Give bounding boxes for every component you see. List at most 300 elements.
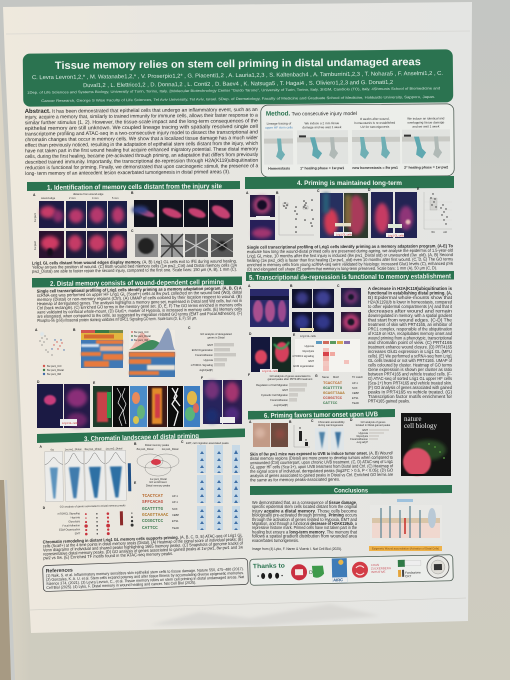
panel A labels: 4 mm (92, 196, 98, 200)
panel E motif table: GCATTTTG (142, 507, 163, 512)
panel B microscopy (131, 191, 233, 227)
panel G motif table: TF match (352, 375, 364, 379)
method column notes: 8 weeks after wound, (360, 117, 390, 121)
section 2 caption: memory (Distal) or non-memory regions (Ctrl). (A) UMAP of cells colored by their location respect to wound. (B) (37, 294, 242, 302)
panel C GO bar chart: Hypoxia (204, 358, 214, 362)
panel E motif table (134, 480, 179, 531)
references list: (1) Naik, S. et al. Inflammatory memory sensitizes skin epithelial stem cells to tissue damage. Nature 550, 475–480 (2017). (46, 566, 244, 578)
section 6 caption (250, 450, 394, 482)
heading 5: 5. Transcriptional de-repression is functional to memory establishment (249, 273, 452, 282)
panel B density peaks: 8w pw1_Wd (134, 338, 149, 342)
authors (32, 71, 444, 90)
icon: footprint logo (257, 573, 283, 579)
panel A whole-mount images: A (246, 191, 249, 195)
logo: green foundation (398, 559, 421, 567)
section 3 caption: representative distal memory peaks. (D) GO analysis of genes associated to gained peaks at 1w pw1, 8w pw1 and 1w (43, 544, 244, 556)
abstract text block: epithelial memory are still unknown. We coupled lineage tracing with spatially resolved single cell (25, 124, 258, 132)
panel E segmentation images: E (93, 381, 96, 385)
panel B tumour plot: B (289, 420, 292, 424)
references list (46, 566, 245, 590)
conclusions text: through the activation of genes related to Hypoxia, EMT and (252, 517, 358, 522)
panel F GO bar chart: Regulation of Cell Migration (256, 383, 289, 387)
panel B heatmap left: B (73, 328, 76, 332)
conclusions text: Image from (4) Lyko, F. Naren & Vlaeric I. Nat Cell Biol (2025). (252, 547, 342, 551)
logo: AIRC (332, 558, 347, 582)
section 5 body text: H2A(K119)Ub is lower in homeostasis, compared (368, 300, 452, 304)
panel G motif table: CEBP (352, 391, 359, 395)
panel D GO chart: D (350, 418, 353, 422)
logo: Deliver green: D (309, 570, 313, 576)
panel A tumour photographs (249, 420, 288, 447)
panel D GO dot plot: GO analysis of genes associated to Distal memory peaks (60, 503, 126, 509)
conclusions text: specific epidermal stem cells located distant from the original (252, 504, 357, 509)
heading 4: 4. Priming is maintained long-term (297, 180, 402, 187)
method column notes: and we wait 1 week (412, 124, 440, 129)
section 4 caption: evaluate how long the wound-distal primed cells are preserved during ageing, we analyse the epidermis of 1.5-year-old (247, 248, 454, 254)
panel E motif table: Distal memory peaks (146, 484, 171, 488)
panel D pS6 images: Lrig1 GL cells (388, 234, 404, 238)
panel B density peaks (129, 328, 175, 350)
method stage labels (268, 165, 448, 171)
panel D Glut1 images: D (37, 380, 40, 384)
panel E GO heatmap: EMT (309, 359, 314, 363)
panel: thanks to / funders (250, 555, 453, 585)
abstract text block: described trained immunity. Importantly, the transcriptional de-repression through H2A(K119)ubiquitination (25, 158, 258, 166)
panel D GO dot plot (43, 503, 134, 536)
panel D GO dot plot: D (43, 506, 46, 510)
panel G motif table: SOX (352, 386, 358, 390)
section 5 body text: functional in establishing distal priming. (A, (368, 290, 452, 296)
panel E motif table: SOX (172, 507, 178, 511)
section 5 body text: decreases after wound and remain (368, 308, 453, 314)
panel B microscopy: B (131, 191, 134, 195)
conclusions text (252, 500, 358, 551)
panel B tumour plot (289, 420, 310, 447)
heading 2: 2. Distal memory consists of wound-dependent cell priming (50, 279, 224, 288)
abstract text block: reduction is functional for priming. Finally, we demonstrated that upon carcinogenic stimuli, the presence of a (25, 163, 258, 171)
UMAP legend (43, 364, 64, 376)
panel B venn diagram (134, 442, 179, 481)
conclusions text: repressive histone mark. Primed cells have not taken part in the (252, 525, 358, 530)
title banner (23, 49, 453, 107)
logo: Deliver green (309, 566, 324, 578)
panel: section 1 (27, 181, 240, 274)
conclusions orange legend bar: Epigenetic Wound accumulation (Activation of Distal Cells) (372, 547, 439, 551)
panel F GO bar chart: Focal Adhesion (270, 398, 289, 402)
section 5 body text: G) ATAC-seq of sorted Lrig1 GL upper HF cells (368, 376, 453, 381)
panel D pS6 images: D (368, 188, 371, 192)
section 1 caption: pw2_Distal) are able to faster repair the second injury, compared to the first one. Scale bars: 150 µm (A, B), 1 mm (C). (32, 267, 237, 274)
section 3 caption: Chromatin remodeling in distant Lrig1 GL memory cells supports priming. (A, B, C, D, E) ATAC-seq of Lrig1 GL (43, 532, 243, 544)
panel: section 3 (37, 428, 245, 560)
section 3 caption: Venn diagrams of individual and shared peaks highlighting 1665 memory peaks. (C) Snapshots of genome tracks of (43, 540, 244, 552)
panel G motif table: TEAD (352, 401, 359, 405)
panel D GO dot plot: ECM Organization (59, 527, 81, 532)
method stage labels: 1° healing phase = 1w pw1 (300, 166, 344, 170)
section 3 caption: cells (Scarf+) at the 4 time points in distal memory areas (Distal). (A) Heatmap of the signal score of individual peaks; (B) (43, 536, 243, 548)
panel E GO heatmap: Hypoxia (305, 344, 315, 348)
references heading: References (46, 568, 73, 574)
journal cover: Nature Cell Biology: nature (404, 415, 422, 423)
panel E GO heatmap: ECM organization (293, 364, 315, 368)
panel E motif table: CCGGCTCC (142, 519, 163, 524)
panel D PRT4165 images (249, 332, 291, 373)
conclusions text: We demonstrated that, as a consequence of tissue damage, (252, 500, 357, 505)
section 3 caption: pw2 vs 0w. (E) Enriched TF motifs found in the ATAC-seq memory peaks. (43, 551, 173, 560)
panel B heatmap left (73, 328, 123, 368)
panel C GO bar chart: GO analysis of deregulated (200, 332, 232, 336)
section 4 caption (247, 243, 454, 272)
section 2 caption: Phospho-S6 (pS6) ribosomal protein staining validates mTORC1 Signaling GO term. Scale bars (D, E, F): 50 µm. (37, 316, 197, 323)
panel B density peaks: 8w pw1_Ctrl (134, 330, 149, 334)
panel D GO chart: Glycolysis (356, 434, 369, 438)
section 4 caption: Lrig1 GL mice, 10 months after the first injury is induced (8w pw1_Distal old) or unwounded (0w_old). (A, B) Second (247, 252, 454, 259)
panel B venn diagram: Distal memory peaks (145, 443, 170, 447)
conclusions heading (250, 485, 452, 495)
panel A UMAP scatter (35, 328, 65, 376)
panel E motif table: CATTCC (142, 526, 158, 531)
references list: Science 374, (2021). (3) Levra Levron, C., et al. Tissue memory relies on stem cell priming in distal undamaged areas. Nat (46, 574, 245, 586)
panel B H2AK119Ub images (290, 284, 334, 332)
abstract text block: long- term memory of an antecedent lesion exacerbated tumorigenesis in distal primed areas (3). (25, 169, 230, 177)
method column notes: upper HF stem cells (265, 125, 293, 130)
references list: Cell Biol (2025). (4) Lyko, F. Distal memory in wound healing and cancer. Nat Cell Biol (2025). (46, 580, 196, 590)
panel B H2AK119Ub images: B (290, 284, 293, 288)
panel C accessibility heatmaps: during carcinogenesis (318, 423, 344, 427)
panel F GO bar chart: GO analysis of genes associated to (270, 374, 311, 378)
abstract text block: Abstract. It has been demonstrated that epithelial cells that undergo an inflammatory event, such as an (25, 107, 258, 115)
conclusions text: injury acquire a distal memory . Those cells become (252, 508, 358, 513)
logo: Fondazione CRT (398, 569, 421, 578)
conclusions text: Migration, and through a functional decrease of H2AK119ub, a (252, 521, 358, 526)
logo: university seal (427, 556, 449, 578)
section 6 caption: GL upper HF cells (Sca-1+), upon UVB treatment from Distal and Ctrl. (C) Heatmap of (250, 463, 394, 470)
section 5 body text: A decrease in H2A(K119)ubiquitination is (368, 286, 453, 291)
logo: red circle (291, 564, 307, 580)
panel C GO bar chart: EMT (208, 343, 213, 347)
abstract text block: transcriptome profiling and ATAC-seq in a two-consecutive injury model to dissect the transcriptional and (25, 129, 258, 138)
panel D GO chart: GO analysis of genes (361, 420, 386, 424)
logo: Fondazione CRT: CRT (405, 574, 411, 578)
panel C wound images (337, 284, 361, 332)
method column notes: damage and we wait 1 week (302, 125, 342, 129)
panel: conclusions (250, 485, 452, 551)
conclusions text: exacerbates tumorigenesis. (252, 538, 299, 543)
section 2 caption: Heatmap of deregulated genes. The analysis highlights a memory gene set, expressed in Distal and Wd cells, but not in (37, 298, 243, 306)
method column notes (265, 116, 445, 130)
section 5 body text: Gene expression is shown per cluster as ratio (368, 367, 453, 372)
method column notes: Lineage tracing of (267, 121, 291, 126)
authors: C. Levra Levron1,2,* , M. Watanabe1,2,* , V. Proserpio1,2* , G. Piacenti1,2 , A. Lauria1,2,3 , S. Kaltenbach4 , A. Tamburrini1,2,3 , T. Nohara5 , F. Anselmi1,2 , C. (32, 71, 443, 81)
method schematic: second healing (402, 129, 450, 164)
title: Tissue memory relies on stem cell priming in distal undamaged areas (55, 56, 421, 72)
thanks heading: Thanks to (253, 563, 285, 570)
panel A labels: 1w pw1 (33, 213, 37, 222)
panel C wound images: C (337, 284, 340, 288)
section 5 body text: to other epidermal compartments (A) and that it (368, 304, 453, 309)
authors: Duval1,2 , L. Elettrico1,2 , D. Donna1,2 , L. Conti2 , D. Baev4 , K. Natsuga5 , T. Hagai4 , S. Oliviero1,2,3 and G. Donati1,2 (83, 80, 393, 89)
abstract text block: effect than previously noticed, resulting in the adaptation of epithelial stem cells distant from the injury, which (25, 141, 258, 149)
panel E motif table: GCAGTTAAAC (142, 513, 169, 518)
section 6 caption: the same as for memory peaks-associated genes. (250, 477, 340, 482)
panel E motif table: ETS1 (172, 519, 179, 523)
panel A microscopy row 2 (39, 231, 127, 258)
method schematic: first healing (297, 130, 348, 164)
panel C GO bar chart: mTORC1 Signaling (191, 363, 214, 367)
heading 6: 6. Priming favors tumor onset upon UVB (264, 411, 378, 420)
panel D GO dot plot: Hypoxia (71, 515, 81, 519)
panel B dot plot: B (276, 191, 279, 195)
panel G motif table: CATTCC (323, 402, 338, 406)
panel C GO bar chart: -log10(adjP) (199, 368, 213, 372)
panel A epidermal whole-mount (248, 284, 289, 327)
section 2 caption: Ctrl (back rectangle). (C) Enriched GO terms in the memory gene set. (D, E, F) The GO terms enriched in memory cells (37, 302, 242, 310)
panel C GO bar chart: C (188, 326, 191, 330)
section 5 body text: between PRT4165 and vehicle treated cells. (F- (368, 372, 452, 376)
section 5 body text: cells). (E) We performed a scRNA-seq from Lrig1 (368, 354, 452, 358)
panel E motif table: AP-1 (172, 500, 178, 504)
section 5 body text: PRT4165 gained peaks. (368, 398, 410, 404)
section 2 caption: are elongated, when compared to 8w cells, as suggested by migration related GO terms (EMT and Focal Adhesion). (F) (37, 311, 243, 319)
panel C Glut1 images: Lrig1 GL cells (336, 232, 352, 236)
panel A labels (33, 192, 118, 250)
panel F pS6 images (201, 376, 242, 424)
panel A peak heatmaps (39, 443, 131, 502)
panel C GO bar chart: Focal Adhesion (195, 353, 214, 357)
panel E GO heatmap: Lrig1 GL cells (300, 334, 316, 338)
panel A tumour photographs: A (249, 420, 252, 424)
panel C GO bar chart: ECM Organization (192, 348, 214, 352)
panel C Glut1 images: C (317, 189, 320, 193)
method column notes: overlapping tissue damage (407, 120, 445, 125)
method schematic: new homeostasis (352, 130, 400, 164)
method column notes: homeostasis is re-established (354, 121, 396, 125)
heading 1: 1. Identification of memory cells distant from the injury site (47, 183, 222, 192)
panel C Glut1 images (317, 189, 368, 238)
panel G motif table: G (315, 374, 318, 378)
logo: Chan Zuckerberg Initiative: ZUCKERBERG (371, 566, 392, 571)
section 5 body text: PRC1 complex, responsible of the ubiquitination (368, 326, 452, 332)
panel: section 6 (248, 409, 395, 482)
panel E motif table: TCACTCAT (142, 494, 163, 499)
panel A labels: 2 mm (69, 196, 75, 200)
panel: section 4 (245, 176, 454, 272)
panel D Glut1 images: Lrig1 GL cells (62, 421, 78, 425)
panel D GO chart: Hypoxia (359, 431, 369, 435)
panel C accessibility heatmaps: C (311, 419, 314, 423)
panel F GO bar chart: gained peaks after PRT4165 treatment (268, 377, 313, 381)
panel: section 2 (32, 276, 243, 428)
section 5 body text: peaks in PRT4165 vs vehicle treated. (G) (368, 390, 453, 394)
panel G motif table: ETS1 (352, 396, 359, 400)
panel D GO dot plot: EMT (75, 531, 81, 535)
panel F GO bar chart: F (248, 373, 250, 377)
heading 3: 3. Chromatin landscape of distal priming (84, 433, 199, 443)
panel E cell shape plot: Wt (431, 230, 435, 234)
panel A microscopy row 1 (39, 201, 127, 228)
panel A labels: distance from wound edge (73, 192, 104, 196)
UMAP legend: 8w pw1_Wd (47, 372, 62, 376)
panel E motif table: CEBP (172, 513, 179, 517)
panel A labels: A (33, 193, 36, 197)
heading 4 (245, 176, 454, 189)
panel G motif table: CCGGCTCC (323, 397, 343, 401)
affiliations: 1Dep. of Life Sciences and Systems Biology, University of Turin, Torino, Italy. 2Molecular Biotechnology Center "Guido Tarone", University of Turin, Torino, Italy. 3IIGM, Candiolo (TO), Italy. 4Shmunis School of Biomedicine and (27, 86, 440, 95)
section 5 body text: GL cells treated or not with PRT4165. UMAP of (368, 358, 453, 363)
heading 3 (37, 428, 245, 443)
section 5 body text: (F) GO analysis of genes associated with gained (368, 385, 452, 390)
section 4 caption: healing (1w pw2_old) is faster than first healing (1w pw1_old) even 10 months after first wound. (C, D, E) The GO terms (247, 256, 453, 263)
section 5 body text: of K119 on H2A, recapitulates memory onset and (368, 331, 452, 336)
panel B venn diagram: 8w pw1_Distal (137, 447, 154, 451)
journal cover: Nature Cell Biology: cell biology (404, 422, 437, 430)
panel A peak heatmaps: 8w pw1_Distal (85, 447, 102, 451)
method schematic: homeostasis (264, 130, 293, 165)
conclusions skin schematic (370, 499, 442, 543)
method column notes: We induce a 2 mm tissue (305, 121, 340, 125)
panel C wound closure images (131, 229, 233, 257)
conclusions text: healing but ensure a long-term memory. The memory that (252, 529, 358, 534)
panel F GO bar chart: -Log10(adjP) (273, 403, 288, 407)
panel F GO bar chart: Cytosolic Cell Migration (261, 393, 289, 397)
panel F pS6 images: F (201, 376, 203, 380)
section 6 caption: distal memory regions (Distal) are more prone to develop tumors when compared to (250, 455, 393, 461)
panel A peak heatmaps: A (39, 445, 43, 449)
panel D GO dot plot: mTORC1 Signaling (58, 511, 80, 516)
panel G motif table: Name (322, 375, 329, 379)
panel A peak heatmaps: 1w pw2_Distal (106, 446, 123, 451)
logo: Chan Zuckerberg Initiative (352, 561, 392, 578)
section 5 body text: wound priming from a phenotypic, transcriptional (368, 336, 452, 340)
panel G motif table (315, 374, 364, 406)
section 4 caption: enriched in memory cells from young scRNA-seq were validated by histology: increased Glut1 levels (C), enhanced pS6 (247, 261, 454, 267)
section 5 body text: (Sca-1+) from PRT4165 and vehicle treated skin. (368, 380, 452, 386)
panel A labels: wound edge (41, 196, 56, 200)
section 5 body text (368, 286, 453, 404)
section 4 caption: Single cell transcriptional profiling of Lrig1 cells identify priming as a memory adaptation program. (A-E) To (247, 243, 453, 250)
panel E motif table: TEAD (172, 526, 179, 530)
section 5 body text: treatment of skin with PRT4165, an inhibitor of (368, 322, 453, 327)
panel C accessibility heatmaps (311, 419, 345, 450)
method column notes: We induce an identical and (407, 116, 445, 121)
panel D PRT4165 images: Lrig1 GL cells (262, 369, 278, 373)
panel E GO heatmap: mTORC1 signaling (292, 354, 315, 358)
method heading: Method. Two consecutive injury model (266, 110, 357, 118)
panel E GO heatmap: Glycolysis (302, 349, 315, 353)
panel: method (261, 104, 454, 177)
panel: section 5 (246, 271, 454, 407)
panel A labels: 5 mm (112, 196, 118, 200)
panel E cell shape plot: old (443, 230, 447, 234)
panel C GO bar chart (188, 326, 236, 372)
panel C accessibility heatmaps: Chromatin accessibility (318, 420, 345, 424)
section 2 caption: were validated by confocal whole-mount. (D) Glut1+, marker of Hypoxia, is increased in memory cells. (E) Memory cells (37, 306, 242, 315)
panel A peak heatmaps: 1w pw1_Distal (65, 447, 82, 451)
panel G motif table: GCATTTTG (323, 387, 343, 391)
section 6 caption: unwounded (Ctrl) counterpart, upon chronic UVB treatment. (C, D) ATAC-seq of Lrig1 (250, 459, 394, 465)
panel D GO chart: located in Distal gained peaks (356, 423, 391, 427)
section 3 caption (43, 532, 244, 560)
panel B venn diagram: 1w pw1_Distal (162, 447, 179, 451)
panel D pS6 images (368, 188, 417, 238)
panel A whole-mount images (246, 191, 275, 240)
logo: Chan Zuckerberg Initiative: CHAN (371, 563, 379, 567)
section 4 caption: (D) and elongated cell shape (E) confirm that memory is long-term preserved. Scale bars: 1 mm (A), 50 µm (C, D). (247, 265, 437, 272)
logo: AIRC: AIRC (333, 577, 343, 582)
panel B dot plot (276, 191, 314, 235)
abstract text block: cells, during the first healing, became pre-activated through priming, an adaptation that differs from previously (25, 152, 259, 160)
section 2 caption (37, 285, 243, 323)
panel C genome track snapshots: C (181, 440, 184, 444)
section 1 caption: Lrig1 GL cells distant from wound edges display memory. (A, B) Lrig1 GL cells exit to IFE during wound healing. (32, 258, 237, 266)
section 1 caption: Yellow arrows the position of wound. (C) Both wound bed memory cells (1w pw2_Ctrl) and Distal memory cells (1w (32, 263, 238, 270)
panel B venn diagram: 1w pw1_Distal (150, 477, 167, 481)
method stage labels: Homeostasis (268, 166, 290, 171)
panel D GO dot plot: Glycolysis (68, 519, 81, 523)
panel D GO chart: EMT (363, 428, 368, 432)
panel A labels: 1w pw2 (33, 241, 37, 250)
conclusions heading: Conclusions (334, 488, 369, 494)
panel F GO bar chart: EMT (283, 388, 288, 392)
panel C genome track snapshots (181, 440, 240, 530)
panel G motif table: AP-1 (352, 381, 358, 385)
section 5 body text: cells coloured by cluster. Heatmap of GO terms (368, 362, 453, 368)
panel C GO bar chart: genes in Distal (207, 336, 225, 340)
panel A UMAP scatter: A (35, 328, 38, 332)
references list: (2) Gonzales, K. A. U. et al. Stem cells expand potency and alter tissue fitness by accumulating diverse epigenetic memories. (46, 570, 244, 582)
method column notes: UV for tumorigenesis (360, 125, 390, 129)
panel: references (43, 558, 248, 592)
panel D PRT4165 images: D (249, 332, 252, 336)
section 5 body text: increases Glut1 expression in Lrig1 GL (MFU (368, 349, 452, 354)
conclusions text: follows a spatial gradient distribution from wounded area (252, 534, 358, 539)
section 5 body text: Transcription factor motifs enrichment for (368, 394, 453, 399)
panel E cell shape plot: E (417, 187, 420, 191)
abstract text block: have not taken part in the first wound healing but acquire enhanced migratory potential. These distal memory (25, 146, 259, 154)
section 5 body text: and chromatin point of view. (C) PRT4165 (368, 340, 453, 345)
panel A peak heatmaps: 0w (51, 448, 54, 452)
affiliations (27, 86, 440, 103)
journal cover: Nature Cell Biology (401, 413, 451, 476)
section 5 body text: that start from wound edges. (C-D) The (368, 318, 453, 322)
section 2 caption: Single cell transcriptional profiling of Lrig1 cells identify priming as a memory adaptation program. (A, B, C) A (37, 285, 242, 294)
logo: Fondazione CRT: Fondazione (405, 570, 421, 575)
panel E GO heatmap: E (293, 333, 296, 337)
method stage labels: 2° healing phase = 1w pw2 (404, 165, 448, 170)
panel F GO bar chart (248, 373, 313, 407)
abstract text block: similar further stimulus (1, 2). However, the tissue-scale impact and the long-term consequences of the (25, 118, 258, 126)
abstract text block: injury, acquire a memory that, similarly to trained immunity for immune cells, allows their faster response to a (25, 113, 258, 121)
section 5 body text: treatment enhance wound closure. (D) PRT4165 (368, 344, 452, 350)
section 5 body text: downregulated in memory, with a spatial gradient (368, 313, 453, 318)
panel A epidermal whole-mount: A (248, 284, 251, 288)
panel G motif table: TCACTCAT (323, 382, 343, 386)
panel C wound closure images: C (131, 229, 134, 233)
panel E motif table: GO enrichment (149, 480, 167, 484)
abstract text block (25, 107, 259, 177)
method stage labels: new homeostasis = 8w pw1 (352, 166, 398, 170)
abstract text block: chromatin changes that occur in memory cells. We show that a localized tissue damage has a much wider (25, 135, 258, 143)
panel G motif table: GCAGTTAAA (323, 392, 345, 396)
panel D GO chart: Focal Adhesion (350, 437, 369, 441)
UMAP legend: 8w pw1_Distal (47, 368, 64, 372)
panel D GO chart: -Log adj P (356, 440, 368, 444)
panel D Glut1 images (37, 380, 90, 428)
conclusions text: biologically pre-activated through priming. Priming occurs (252, 513, 357, 518)
panel B heatmap right (129, 352, 175, 377)
affiliations: Cancer Research, George S Wise Faculty of Life Sciences, Tel Aviv University, Tel Aviv, Israel. 5Dep. of Dermatology, Faculty of Medicine and Graduate School of Medicine, Hokkaido University, Sapporo, Japan. (41, 95, 435, 103)
panel B venn diagram: B (134, 442, 137, 446)
